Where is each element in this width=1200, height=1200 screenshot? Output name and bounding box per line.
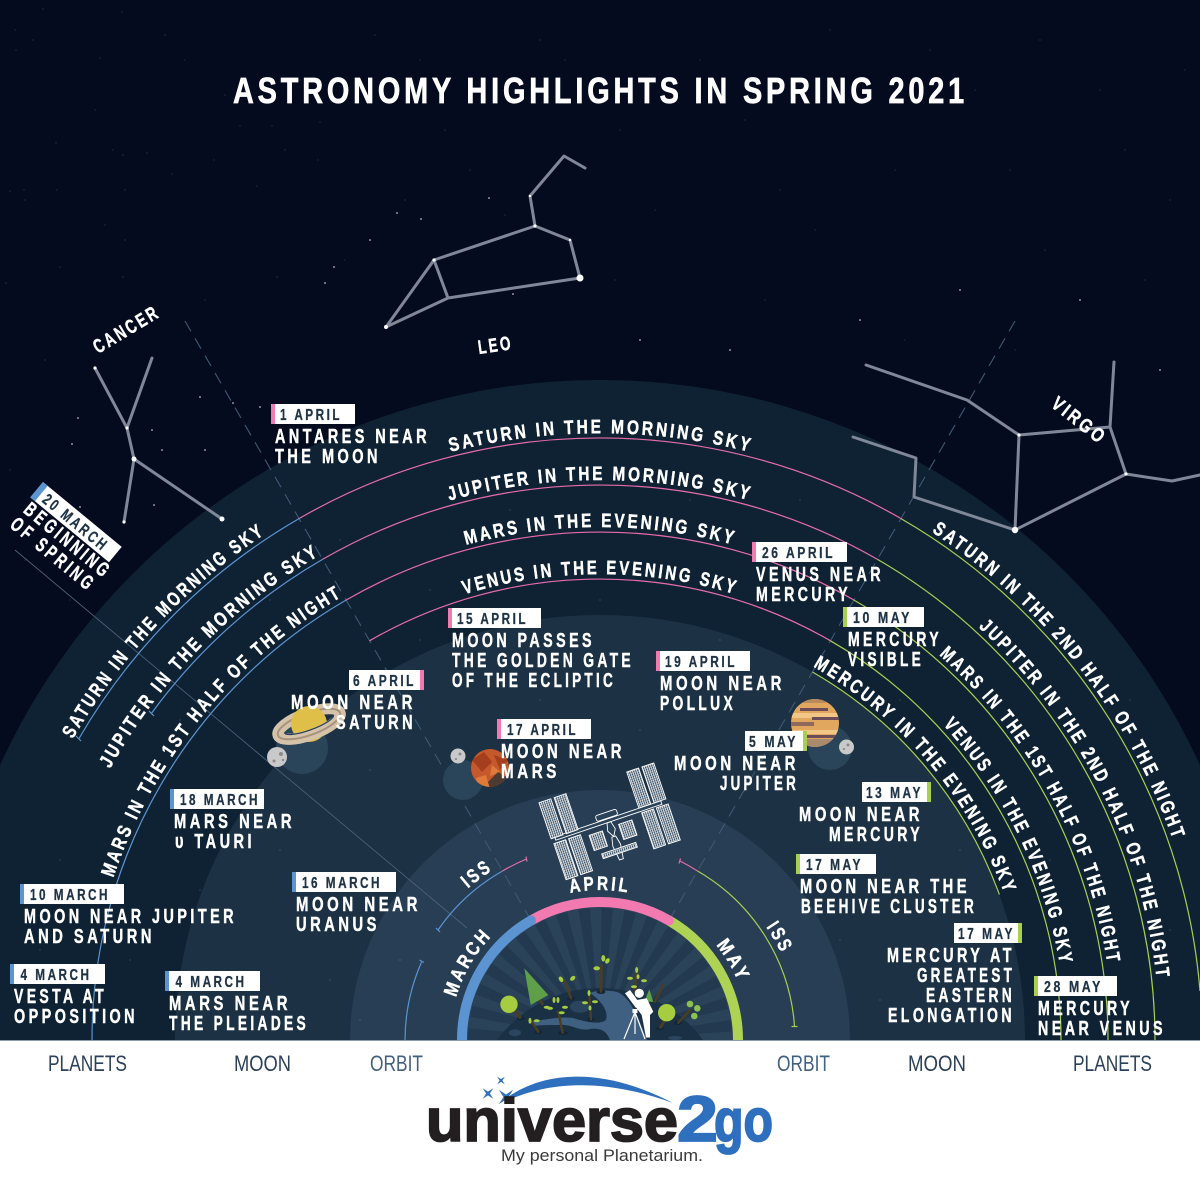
event: 28 May <box>1034 976 1166 1040</box>
arc text: March: MARCH <box>443 928 490 997</box>
event: 10 March: AND SATURN <box>24 926 155 948</box>
event: 17 April <box>497 719 625 783</box>
event: 1 April <box>271 404 430 468</box>
arc text: April: APRIL <box>570 876 628 894</box>
month ring <box>462 902 738 1040</box>
orbit line: Jupiter <box>149 485 1155 1040</box>
event: 16 March <box>292 872 421 936</box>
event: 17 April: MARS <box>501 761 560 783</box>
event: 26 April <box>752 542 884 606</box>
dome stars <box>40 500 1170 1020</box>
arc text: Jupiter right: JUPITER IN THE 2ND HALF OF THE NIGHT <box>980 619 1170 976</box>
logo: universe2go: My personal Planetarium. <box>501 1146 703 1165</box>
arc text: Venus right: VENUS IN THE EVENING SKY <box>945 715 1074 961</box>
Mars with moon <box>443 748 509 800</box>
event: 20 March beginning of spring: BEGINNING <box>19 499 116 584</box>
orbit line: Venus <box>370 579 1061 1040</box>
event: 15 April: MOON PASSES <box>452 630 595 652</box>
arc text: May: MAY <box>716 938 750 977</box>
event: 17 May elongation <box>887 923 1022 1027</box>
event: 26 April: 26 APRIL <box>762 545 835 562</box>
event: 10 May: MERCURY <box>848 629 942 651</box>
label: Cancer: CANCER <box>89 301 164 358</box>
observer with telescope <box>624 989 653 1039</box>
arc text: Jupiter left: JUPITER IN THE MORNING SKY <box>100 544 315 768</box>
event: 17 May elongation: MERCURY AT <box>887 945 1015 967</box>
orbit line: ISS <box>405 856 798 1040</box>
event: 10 March: 10 MARCH <box>30 887 110 904</box>
arc text: Mars left: MARS IN THE 1ST HALF OF THE NIGHT <box>100 585 338 878</box>
footer panel <box>0 1040 1200 1200</box>
space station <box>539 763 681 880</box>
arc text: Venus top: VENUS IN THE EVENING SKY <box>460 560 738 594</box>
dashed line: start of May <box>645 321 1015 962</box>
event: 17 May Beehive: 17 MAY <box>806 857 863 874</box>
arc text: Mars top: MARS IN THE EVENING SKY <box>463 513 736 545</box>
Jupiter with moon <box>790 699 854 770</box>
event: 20 March beginning of spring: OF SPRING <box>6 513 100 596</box>
label: Leo: LEO <box>477 332 514 359</box>
event: 16 March: 16 MARCH <box>302 875 382 892</box>
event: 16 March: MOON NEAR <box>296 894 421 916</box>
event: 10 March: MOON NEAR JUPITER <box>24 906 237 928</box>
event: 4 March Pleiades: 4 MARCH <box>176 974 246 991</box>
event: 18 March: υ TAURI <box>175 831 255 853</box>
event: 4 March Vesta: OPPOSITION <box>14 1006 138 1028</box>
event: 26 April: MERCURY <box>756 584 851 606</box>
event: 5 May: JUPITER <box>720 773 799 795</box>
event: 4 March Pleiades <box>165 971 309 1035</box>
event: 16 March: URANUS <box>296 914 380 936</box>
sun rays inside month ring <box>467 907 733 1040</box>
constellation: Virgo <box>853 362 1200 533</box>
event: 13 May: 13 MAY <box>866 785 923 802</box>
line: start of spring <box>15 550 467 928</box>
faint background stars <box>6 9 1185 600</box>
event: 17 May elongation: 17 MAY <box>958 926 1015 943</box>
event: 6 April <box>291 670 424 734</box>
event: 28 May: MERCURY <box>1038 998 1133 1020</box>
event: 13 May: MOON NEAR <box>799 804 923 826</box>
orbit line: Saturn <box>76 438 1200 991</box>
arc text: Mercury: MERCURY IN THE EVENING SKY <box>814 655 1017 890</box>
event: 15 April: THE GOLDEN GATE <box>452 650 634 672</box>
event: 13 May <box>799 782 931 846</box>
footer labels: ORBIT <box>370 1051 423 1076</box>
solar arrays right <box>627 763 680 849</box>
arc text: ISS right: ISS <box>766 920 792 951</box>
event: 4 March Vesta <box>10 964 138 1028</box>
event: 1 April: ANTARES NEAR <box>275 426 430 448</box>
event: 1 April: 1 APRIL <box>280 407 342 424</box>
event: 17 April: 17 APRIL <box>507 722 578 739</box>
logo: universe2go <box>426 1073 773 1165</box>
dome: planets zone <box>0 380 1200 1040</box>
arc text: Saturn right: SATURN IN THE 2ND HALF OF THE NIGHT <box>933 522 1186 836</box>
arc text: ISS left: ISS <box>460 861 490 888</box>
event: 18 March: MARS NEAR <box>174 811 295 833</box>
event: 15 April <box>448 608 634 692</box>
footer labels <box>48 1051 1152 1076</box>
title: ASTRONOMY HIGHLIGHTS IN SPRING 2021 <box>233 70 968 111</box>
solar arrays left <box>539 793 593 880</box>
radiators <box>589 820 637 851</box>
logo: universe2go: go <box>714 1087 773 1154</box>
background stars <box>72 198 1160 507</box>
label: Virgo: VIRGO <box>1047 393 1111 449</box>
dome: orbit zone <box>350 790 850 1040</box>
event: 19 April: MOON NEAR <box>660 673 785 695</box>
dashed line: start of April <box>185 321 555 962</box>
event: 17 May Beehive <box>796 854 977 918</box>
event: 17 May elongation: ELONGATION <box>888 1005 1015 1027</box>
modules <box>589 806 639 865</box>
footer labels: ORBIT <box>777 1051 830 1076</box>
event: 10 March <box>20 884 237 948</box>
event: 26 April: VENUS NEAR <box>756 564 884 586</box>
constellation: Cancer <box>93 358 225 524</box>
saplings <box>528 955 701 1033</box>
orbit line: Mars <box>92 532 1108 1040</box>
event: 6 April: MOON NEAR <box>291 692 416 714</box>
arc text: Jupiter top: JUPITER IN THE MORNING SKY <box>448 466 752 500</box>
event: 13 May: MERCURY <box>829 824 923 846</box>
event: 17 May Beehive: MOON NEAR THE <box>800 876 970 898</box>
earth with trees and observer <box>497 955 703 1040</box>
event: 20 March beginning of spring: 20 MARCH <box>39 491 111 555</box>
logo: universe2go: universe <box>426 1087 678 1154</box>
event: 5 May: MOON NEAR <box>674 753 799 775</box>
event: 20 March beginning of spring <box>4 482 128 599</box>
truss <box>555 801 662 840</box>
event: 19 April: POLLUX <box>660 693 736 715</box>
event: 17 April: MOON NEAR <box>501 741 625 763</box>
event: 4 March Vesta: VESTA AT <box>14 986 107 1008</box>
event: 17 May elongation: GREATEST <box>917 965 1015 987</box>
event: 28 May: 28 MAY <box>1044 979 1103 996</box>
logo: universe2go: 2 <box>677 1083 718 1155</box>
event: 18 March: 18 MARCH <box>180 792 260 809</box>
arc text: Saturn left: SATURN IN THE MORNING SKY <box>62 523 261 738</box>
event: 5 May <box>674 731 807 795</box>
Saturn with moon <box>267 702 344 774</box>
footer labels: MOON <box>234 1051 291 1076</box>
event: 4 March Pleiades: THE PLEIADES <box>169 1013 309 1035</box>
event: 6 April: SATURN <box>336 712 416 734</box>
footer labels: PLANETS <box>48 1051 127 1076</box>
event: 10 May: 10 MAY <box>853 610 912 627</box>
event: 6 April: 6 APRIL <box>353 673 416 690</box>
event: 18 March <box>170 789 295 853</box>
event: 4 March Vesta: 4 MARCH <box>20 967 92 984</box>
arc text: Mars right: MARS IN THE 1ST HALF OF THE NIGHT <box>940 645 1121 960</box>
tree bases <box>517 990 682 1035</box>
event: 10 May: VISIBLE <box>848 649 924 671</box>
event: 19 April <box>656 651 785 715</box>
constellation: Leo <box>384 156 585 329</box>
dome: moon zone <box>175 615 1025 1040</box>
footer labels: MOON <box>908 1051 966 1076</box>
event: 17 May elongation: EASTERN <box>926 985 1015 1007</box>
event: 4 March Pleiades: MARS NEAR <box>169 993 291 1015</box>
event: 5 May: 5 MAY <box>749 734 798 751</box>
event: 19 April: 19 APRIL <box>665 654 737 671</box>
footer labels: PLANETS <box>1073 1051 1152 1076</box>
round trees <box>500 996 675 1028</box>
arc text: Saturn top: SATURN IN THE MORNING SKY <box>448 420 752 452</box>
orbit line: Mercury <box>812 672 999 895</box>
event: 15 April: 15 APRIL <box>457 611 528 628</box>
event: 15 April: OF THE ECLIPTIC <box>452 670 616 692</box>
event: 10 May <box>843 607 942 671</box>
event: 17 May Beehive: BEEHIVE CLUSTER <box>801 896 977 918</box>
event: 1 April: THE MOON <box>275 446 381 468</box>
pine tree <box>524 968 548 1005</box>
